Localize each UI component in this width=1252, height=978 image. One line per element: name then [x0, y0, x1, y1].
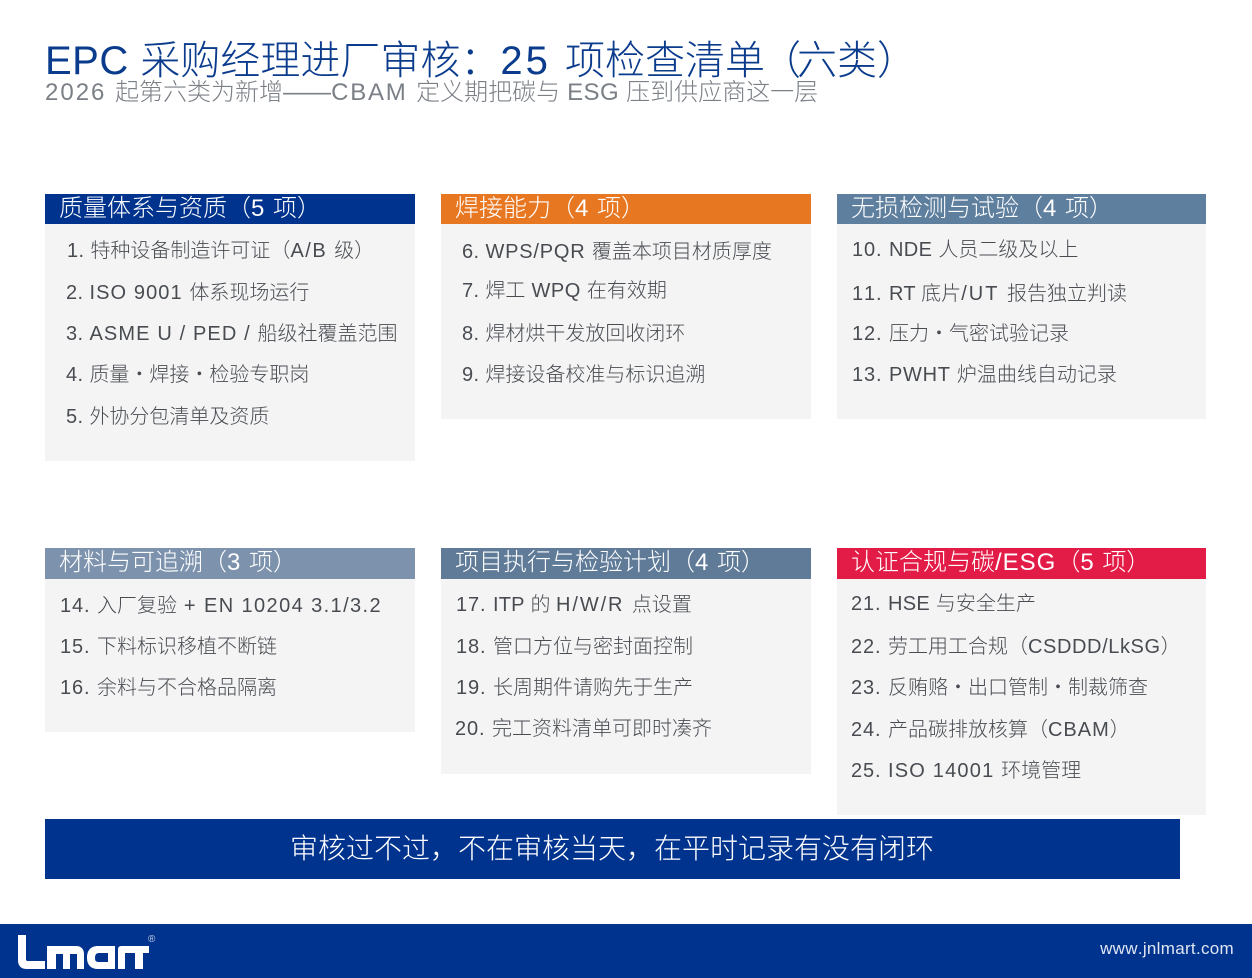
item 4: 4. 质量・焊接・检验专职岗 [66, 364, 309, 386]
item 7: 7. 焊工 WPQ 在有效期 [462, 280, 667, 302]
item 14: 14. 入厂复验 + EN 10204 3.1/3.2 [60, 595, 382, 617]
title: EPC 采购经理进厂审核：25 项检查清单（六类） [45, 39, 917, 83]
footer bar [0, 924, 1252, 978]
item 20: 20. 完工资料清单可即时凑齐 [455, 718, 712, 740]
panel: compliance [837, 548, 1206, 815]
heading: execution: 项目执行与检验计划（4 项） [455, 549, 765, 576]
takeaway banner [45, 819, 1180, 879]
item 19: 19. 长周期件请购先于生产 [456, 677, 693, 699]
heading: welding: 焊接能力（4 项） [455, 195, 645, 222]
item 21: 21. HSE 与安全生产 [851, 593, 1036, 615]
item 25: 25. ISO 14001 环境管理 [851, 760, 1081, 782]
item 17: 17. ITP 的 H/W/R 点设置 [456, 594, 692, 616]
subtitle: 2026 起第六类为新增——CBAM 定义期把碳与 ESG 压到供应商这一层 [45, 79, 818, 106]
heading: materials [45, 548, 415, 579]
item 24: 24. 产品碳排放核算（CBAM） [851, 719, 1130, 741]
panel: NDT [837, 194, 1206, 419]
item 10: 10. NDE 人员二级及以上 [852, 239, 1078, 261]
item 6: 6. WPS/PQR 覆盖本项目材质厚度 [462, 241, 772, 263]
heading: NDT [837, 194, 1206, 224]
item 22: 22. 劳工用工合规（CSDDD/LkSG） [851, 636, 1181, 658]
item 1: 1. 特种设备制造许可证（A/B 级） [67, 240, 374, 262]
item 18: 18. 管口方位与密封面控制 [456, 636, 693, 658]
takeaway banner: 审核过不过，不在审核当天，在平时记录有没有闭环 [290, 833, 934, 864]
item 9: 9. 焊接设备校准与标识追溯 [462, 364, 705, 386]
panel: welding [441, 194, 811, 419]
heading: NDT: 无损检测与试验（4 项） [851, 195, 1113, 222]
item 23: 23. 反贿赂・出口管制・制裁筛查 [851, 677, 1148, 699]
panel: execution [441, 548, 811, 774]
heading: compliance: 认证合规与碳/ESG（5 项） [851, 549, 1150, 576]
item 15: 15. 下料标识移植不断链 [60, 636, 277, 658]
item 8: 8. 焊材烘干发放回收闭环 [462, 323, 685, 345]
item 16: 16. 余料与不合格品隔离 [60, 677, 277, 699]
logo [18, 934, 156, 969]
item 3: 3. ASME U / PED / 船级社覆盖范围 [66, 323, 398, 345]
website url: www.jnlmart.com [1100, 939, 1234, 958]
item 11: 11. RT 底片/UT 报告独立判读 [852, 283, 1127, 305]
logo: ® [148, 934, 156, 945]
item 2: 2. ISO 9001 体系现场运行 [66, 282, 309, 304]
panel: quality [45, 194, 415, 461]
heading: quality [45, 194, 415, 224]
panel: materials [45, 548, 415, 732]
item 12: 12. 压力・气密试验记录 [852, 323, 1069, 345]
item 13: 13. PWHT 炉温曲线自动记录 [852, 364, 1117, 386]
heading: quality: 质量体系与资质（5 项） [59, 195, 321, 222]
heading: materials: 材料与可追溯（3 项） [59, 549, 297, 576]
item 5: 5. 外协分包清单及资质 [66, 406, 269, 428]
heading: welding [441, 194, 811, 224]
